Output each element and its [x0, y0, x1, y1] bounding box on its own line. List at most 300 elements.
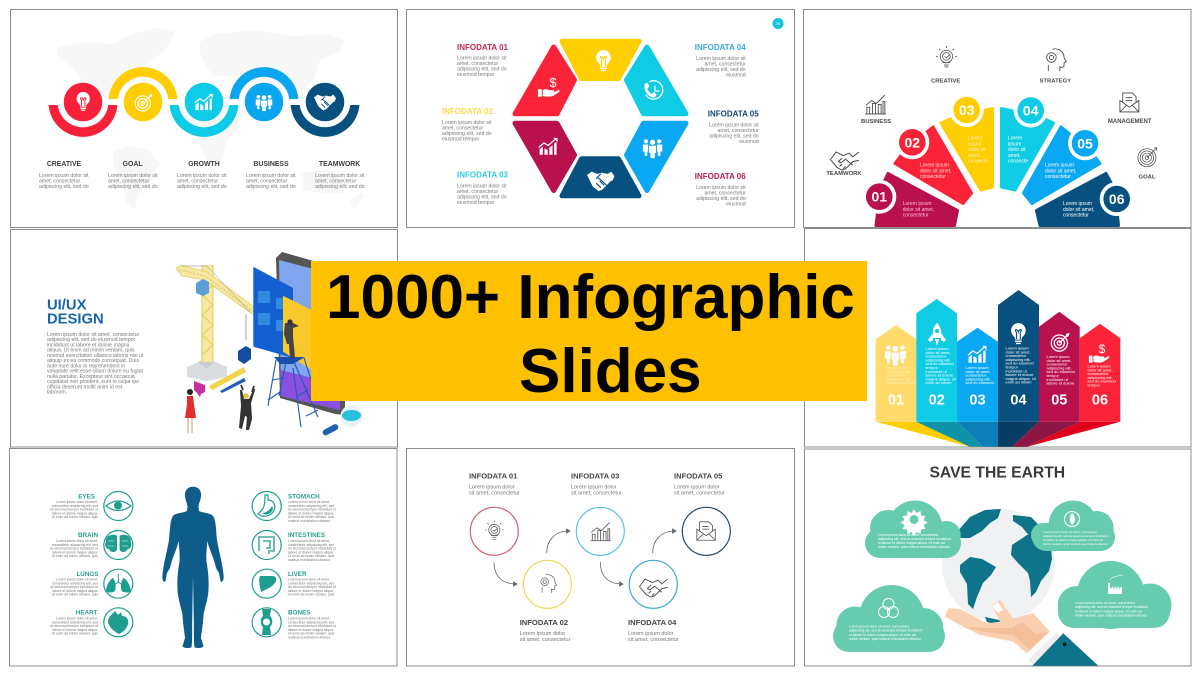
illustration: woman	[185, 389, 196, 433]
cloud: top right	[1031, 500, 1115, 551]
banner: 1000+ Infographic Slides: 1000+ Infographic	[326, 263, 855, 332]
column: creative: amet, consectetur	[39, 178, 81, 184]
arrow column 03: adipiscing elit,	[966, 376, 991, 381]
arrow column 06: adipiscing elit,	[1088, 375, 1113, 380]
segment texts: dolor sit amet,	[903, 207, 934, 213]
column: business: Lorem ipsum dolor sit	[246, 173, 296, 179]
organ: eyes: do eiusmod tempor incididunt ut	[50, 508, 98, 512]
arc: navy	[291, 105, 359, 137]
hexagon segments	[515, 41, 686, 196]
cloud: bottom left	[833, 585, 945, 652]
block: infodata 01: INFODATA 01	[457, 43, 509, 52]
arrow column 04: enim ad minim	[1006, 380, 1032, 385]
arrow column 06: consectetur	[1088, 371, 1109, 376]
segment texts: dolor sit	[1008, 147, 1026, 153]
column: business: amet, consectetur	[246, 178, 288, 184]
column: teamwork	[315, 161, 365, 190]
number badge 05: 05	[1077, 135, 1093, 151]
cloud: bottom left: ut labore et dolore magna aliqua. Ut enim ad	[849, 633, 916, 637]
organ: brain: consectetur adipiscing elit, sed	[52, 543, 98, 547]
organ: heart: consectetur adipiscing elit, sed	[52, 620, 98, 624]
step 2: sit amet, consectetur	[520, 637, 571, 643]
step 5: INFODATA 05	[674, 471, 723, 480]
column: goal: GOAL	[123, 161, 143, 168]
block: infodata 04: Lorem ipsum dolor sit	[696, 56, 746, 62]
cloud: bottom right: adipiscing elit, sed do eiusmod tempor incididunt	[1075, 605, 1148, 609]
column: creative	[39, 161, 89, 190]
organ: stomach: labore et dolore magna aliqua.	[288, 511, 334, 515]
segment texts: dolor sit amet,	[1063, 207, 1094, 213]
segment texts	[903, 136, 1094, 219]
block: infodata 01	[457, 43, 509, 78]
organ: eyes: Ut enim ad minim veniam, quis	[52, 515, 98, 519]
organ: lungs: LUNGS	[76, 571, 98, 578]
organ: brain: Ut enim ad minim veniam, quis	[52, 554, 98, 558]
arrow column 04: Lorem ipsum	[1006, 346, 1029, 350]
organ: intestines: do eiusmod tempor incididunt ut	[288, 547, 336, 551]
icon: bulb	[596, 50, 611, 71]
segment texts: dolor sit amet,	[1045, 168, 1076, 174]
label with icon: creative	[931, 46, 960, 85]
column: creative: CREATIVE	[47, 161, 82, 168]
organ: stomach: Lorem ipsum dolor sit amet,	[288, 500, 330, 504]
cloud: top right: minim veniam, quis nostrud exercitation ullamco	[1043, 542, 1108, 546]
body text: aliquip ex ea commodo consequat. Duis	[47, 358, 139, 364]
cloud: bottom left: adipiscing elit, sed do eiusmod tempor incididunt	[849, 629, 922, 633]
cloud: bottom left: minim veniam, quis nostrud exercitation ullamco	[849, 637, 921, 641]
number badge 06	[1100, 182, 1134, 216]
step 4: INFODATA 04	[628, 618, 677, 627]
arc: blue	[230, 67, 298, 99]
organ: intestines: consectetur adipiscing elit, sed	[288, 543, 334, 547]
organ: liver: consectetur adipiscing elit, sed	[288, 581, 334, 585]
segment texts: Lorem	[968, 136, 982, 142]
organ: stomach: Ut enim ad minim veniam, quis	[288, 515, 335, 519]
organ: bones: consectetur adipiscing elit, sed	[288, 620, 334, 624]
block: infodata 03: INFODATA 03	[457, 170, 509, 180]
segment texts: consectetur	[1063, 213, 1089, 219]
column: teamwork: Lorem ipsum dolor sit	[315, 173, 365, 179]
panel: infodata flow	[406, 448, 794, 666]
block: infodata 04: adipiscing elit, sed do	[696, 67, 746, 73]
body text: nostrud exercitation ullamco laboris nisi ut	[47, 353, 144, 359]
organ: brain: do eiusmod tempor incididunt ut	[50, 547, 98, 551]
arrow column 06: $	[1099, 342, 1106, 356]
organ: lungs	[50, 569, 133, 598]
column: business	[246, 161, 296, 190]
label with icon: teamwork: TEAMWORK	[826, 171, 862, 177]
column: goal: amet, consectetur	[108, 178, 150, 184]
arrow column 05: incididunt ut	[1046, 377, 1069, 382]
arrow column 05: adipiscing elit,	[1046, 365, 1072, 370]
cloud: bottom right: ut labore et dolore magna aliqua. Ut enim ad	[1075, 609, 1142, 613]
segment texts: consectetur	[920, 174, 946, 180]
organ: liver: do eiusmod tempor incididunt ut	[288, 585, 336, 589]
panel: semicircle fan	[804, 10, 1191, 228]
number badge 01: 01	[872, 189, 887, 205]
segment texts: Lorem	[1008, 136, 1022, 142]
icon: handshake	[587, 172, 615, 191]
label with icon: teamwork	[826, 152, 862, 177]
block: infodata 04	[695, 43, 746, 78]
organ: heart: labore et dolore magna aliqua.	[52, 628, 98, 632]
arrow column 05	[1039, 312, 1080, 422]
column: growth: Lorem ipsum dolor sit	[177, 173, 227, 179]
organ: liver: Lorem ipsum dolor sit amet,	[288, 578, 330, 582]
segment texts: dolor sit amet,	[920, 168, 951, 174]
arrow column 02: consectetur	[926, 354, 947, 359]
illustration: tools and chat bubble	[194, 367, 246, 397]
organ: bones: labore et dolore magna aliqua.	[288, 628, 334, 632]
segment texts: ipsum	[968, 141, 981, 147]
segment texts: ipsum	[1008, 141, 1021, 147]
organ: eyes: Lorem ipsum dolor sit amet,	[56, 500, 98, 504]
label with icon: strategy	[1039, 49, 1071, 85]
body text: incididunt ut labore et dolore magna	[47, 342, 130, 348]
arrow column 04: labore et dolore	[1006, 372, 1034, 377]
column: creative: Lorem ipsum dolor sit	[39, 173, 89, 179]
number badge 04	[1014, 94, 1048, 128]
organ: brain: labore et dolore magna aliqua.	[52, 550, 98, 554]
organ: stomach: STOMACH	[288, 493, 320, 500]
number badge 02	[895, 125, 929, 159]
organ: lungs: Lorem ipsum dolor sit amet,	[56, 578, 98, 582]
arc: yellow	[109, 67, 177, 99]
column: goal	[108, 161, 158, 190]
arrow column 02: adipiscing elit,	[926, 357, 951, 362]
hand holding globe	[945, 600, 1098, 666]
organ: bones: do eiusmod tempor incididunt ut	[288, 624, 336, 628]
column: business: adipiscing elit, sed do	[246, 184, 296, 190]
organ: stomach: consectetur adipiscing elit, sed	[288, 504, 334, 508]
banner: 1000+ Infographic Slides	[311, 261, 867, 406]
body text: aliqua. Ut enim ad minim veniam, quis	[47, 348, 135, 354]
arrow column 04: dolor sit amet,	[1006, 349, 1031, 354]
arrow column 06	[1080, 324, 1120, 422]
arrow column 05: labore et dolore	[1046, 381, 1075, 386]
arrows	[494, 529, 676, 586]
block: infodata 03: eiusmod tempor	[457, 200, 494, 206]
segment texts: amet,	[968, 153, 981, 159]
arrow column 03: sed do eiusmod	[966, 380, 994, 385]
organ: liver	[252, 569, 336, 598]
organ: brain	[50, 530, 133, 560]
arrow column 04: sed do eiusmod	[1006, 361, 1034, 366]
block: infodata 01: adipiscing elit, sed do	[457, 66, 507, 72]
world map background	[57, 28, 364, 210]
organ: lungs: Ut enim ad minim veniam, quis	[52, 593, 98, 597]
body text: nulla pariatur. Excepteur sint occaecat	[47, 374, 135, 380]
label with icon: goal	[1138, 148, 1157, 180]
number badge 05	[1068, 126, 1102, 160]
organ: stomach	[252, 492, 336, 523]
arrow column 06: 06	[1092, 392, 1108, 408]
column: goal: Lorem ipsum dolor sit	[108, 173, 158, 179]
arrow column 02: labore et dolore	[926, 373, 954, 378]
panel: creative goal growth timeline	[10, 10, 398, 228]
banner: 1000+ Infographic Slides: Slides	[519, 337, 702, 406]
block: infodata 02	[442, 107, 494, 142]
arrow column 04: tempor	[1006, 364, 1019, 370]
organ: heart: do eiusmod tempor incididunt ut	[50, 624, 98, 628]
organ: eyes: consectetur adipiscing elit, sed	[52, 504, 98, 508]
icon: dollar hand: $	[549, 75, 557, 90]
heading: DESIGN	[47, 312, 104, 328]
arrow column 05: dolor sit amet,	[1046, 358, 1072, 363]
step 5: Lorem ipsum dolor	[674, 485, 720, 491]
body text: cupidatat non proident, sunt in culpa qui	[47, 379, 139, 385]
cloud: top right: Lorem ipsum dolor sit amet, consectetur	[1043, 530, 1097, 534]
block: infodata 02: eiusmod tempor	[442, 136, 479, 142]
circle: cyan chart	[185, 83, 223, 121]
arrow column 04: adipiscing elit,	[1006, 357, 1031, 362]
illustration: phone and panels	[253, 252, 345, 427]
step 4: sit amet, consectetur	[628, 637, 679, 643]
organ: heart: HEART	[76, 610, 98, 617]
block: infodata 01: amet, consectetur	[457, 61, 499, 67]
cloud: top left: Lorem ipsum dolor sit amet, consectetur	[878, 533, 939, 537]
label with icon: creative: CREATIVE	[931, 79, 960, 85]
cloud: bottom right: Lorem ipsum dolor sit amet, consectetur	[1075, 601, 1136, 605]
label with icon: strategy: STRATEGY	[1039, 79, 1071, 85]
panel: UI UX design	[10, 230, 398, 447]
number badge 06: 06	[1109, 191, 1125, 207]
organ: intestines: labore et dolore magna aliqua.	[288, 550, 334, 554]
cloud: top left: adipiscing elit, sed do eiusmod tempor incididunt	[878, 537, 951, 541]
page number badge	[772, 18, 784, 29]
block: infodata 02: adipiscing elit, sed do	[442, 131, 492, 137]
circle: yellow target	[124, 83, 162, 121]
arrow column 04: incididunt ut	[1006, 368, 1028, 373]
arrow column 02: enim ad minim	[926, 380, 952, 385]
block: infodata 02: INFODATA 02	[442, 107, 494, 116]
segment texts: Lorem ipsum	[1045, 162, 1074, 168]
block: infodata 06: adipiscing elit, sed do	[696, 196, 746, 202]
heading: UI/UX	[47, 298, 87, 314]
arrow column 02: dolor sit amet,	[926, 350, 951, 355]
organ: intestines: Ut enim ad minim veniam, quis	[288, 554, 335, 558]
cloud: bottom left: Lorem ipsum dolor sit amet, consectetur	[849, 624, 910, 628]
block: infodata 05: adipiscing elit, sed do	[709, 134, 759, 140]
block: infodata 02: Lorem ipsum dolor sit	[442, 120, 492, 126]
arrow column 02: sed do eiusmod	[926, 361, 954, 366]
block: infodata 03: Lorem ipsum dolor sit	[457, 184, 507, 190]
segment texts: consecte	[968, 158, 988, 164]
fan segments	[876, 108, 1118, 226]
arrow column 05: sed do eiusmod	[1046, 369, 1075, 374]
arrow column 04	[998, 290, 1039, 422]
block: infodata 03: amet, consectetur	[457, 189, 499, 195]
icon: phone clock	[644, 81, 663, 99]
arc: red	[49, 105, 117, 137]
arrow column 05: Lorem ipsum	[1046, 354, 1070, 359]
arrow column 06: sed do eiusmod	[1088, 379, 1116, 384]
column: business: BUSINESS	[253, 161, 289, 168]
panel: hexagon infodata	[406, 10, 794, 228]
segment texts: amet,	[1008, 153, 1021, 159]
segment texts: consecte	[1008, 158, 1028, 164]
label with icon: business	[861, 95, 891, 125]
body text: aute irure dolor in reprehenderit in	[47, 364, 125, 370]
step 1: Lorem ipsum dolor	[469, 485, 515, 491]
organ: stomach: do eiusmod tempor incididunt ut	[288, 508, 336, 512]
arrow column 01: consectetur	[886, 373, 907, 378]
step 3: sit amet, consectetur	[571, 491, 622, 497]
block: infodata 06: INFODATA 06	[695, 172, 746, 181]
number badge 03	[950, 93, 984, 127]
body silhouette	[162, 487, 224, 648]
arrow column 06: tempor	[1088, 382, 1101, 388]
circle: red bulb	[64, 83, 102, 121]
arrow column 02: magna aliqua. Ut	[926, 376, 957, 381]
arrow column 03: 03	[969, 392, 986, 408]
organ: bones: Ut enim ad minim veniam, quis	[288, 632, 335, 636]
arrow column 06: Lorem ipsum	[1088, 364, 1111, 368]
column: teamwork: adipiscing elit, sed do	[315, 184, 365, 190]
block: infodata 05: eiusmod	[739, 139, 759, 145]
segment texts: consectetur	[1045, 174, 1071, 180]
arrow column 01	[876, 325, 916, 422]
organ: liver: LIVER	[288, 571, 307, 578]
cloud: top left: minim veniam, quis nostrud exercitation ullamco	[878, 545, 950, 549]
label with icon: goal: GOAL	[1138, 174, 1156, 180]
organ: bones	[252, 608, 336, 640]
organ: bones: BONES	[288, 610, 310, 617]
arrow column 04: 04	[1010, 392, 1027, 408]
organ: bones: Lorem ipsum dolor sit amet,	[288, 616, 330, 620]
block: infodata 02: amet, consectetur	[442, 126, 484, 132]
icon: chart	[539, 138, 558, 155]
arrow column 05: consectetur	[1046, 362, 1068, 367]
step 3: Lorem ipsum dolor	[571, 485, 617, 491]
step 4: Lorem ipsum dolor	[628, 631, 674, 637]
column: goal: adipiscing elit, sed do	[108, 184, 158, 190]
label with icon: business: BUSINESS	[861, 119, 891, 125]
number badge 03: 03	[959, 102, 975, 118]
body text: Lorem ipsum dolor sit amet, consectetur	[47, 332, 140, 338]
arrow column 01: adipiscing elit,	[886, 376, 911, 381]
arrow column 03: dolor sit amet,	[966, 369, 991, 374]
illustration: man	[239, 385, 255, 430]
organ: intestines: nostrud exercitation ullamco	[288, 558, 330, 562]
body text: adipiscing elit, sed do eiusmod tempor	[47, 337, 136, 343]
block: infodata 06	[695, 172, 746, 208]
arrow column 01: Lorem ipsum	[886, 365, 910, 370]
step 1: INFODATA 01	[469, 471, 518, 480]
organ: lungs: do eiusmod tempor incididunt ut	[50, 585, 98, 589]
column: teamwork: TEAMWORK	[319, 161, 360, 168]
body text: officia deserunt mollit anim id est	[47, 384, 123, 390]
organ: eyes: EYES	[78, 493, 95, 500]
arrow column 03: Lorem ipsum	[966, 365, 989, 370]
block: infodata 06: Lorem ipsum dolor sit	[696, 185, 746, 191]
organ: eyes: labore et dolore magna aliqua.	[52, 511, 98, 515]
column shadows	[876, 422, 1120, 447]
body text: laborum.	[47, 390, 67, 396]
block: infodata 06: eiusmod	[726, 202, 746, 208]
organ: bones: nostrud exercitation ullamco	[288, 636, 330, 640]
page number badge: 36	[776, 21, 781, 26]
arrow column 02: incididunt ut	[926, 369, 948, 374]
organ: intestines: INTESTINES	[288, 532, 325, 539]
arrow column 03: consectetur	[966, 373, 987, 378]
arc: cyan	[170, 105, 238, 137]
block: infodata 03	[457, 170, 509, 206]
arrow column 02: tempor	[926, 365, 939, 370]
arrow column 01: 01	[888, 392, 904, 408]
block: infodata 04: eiusmod	[726, 72, 746, 78]
organ: heart: Lorem ipsum dolor sit amet,	[56, 616, 98, 620]
circle: navy handshake	[306, 83, 344, 121]
block: infodata 05	[708, 110, 759, 145]
arrow column 01: sed do eiusmod	[886, 380, 914, 385]
organ: intestines: Lorem ipsum dolor sit amet,	[288, 539, 330, 543]
step 5: sit amet, consectetur	[674, 491, 725, 497]
illustration: magnifier	[322, 405, 362, 436]
illustration: crane	[176, 265, 258, 381]
segment texts: Lorem ipsum	[1063, 201, 1092, 207]
block: infodata 05: amet, consectetur	[717, 128, 759, 134]
block: infodata 05: INFODATA 05	[708, 110, 759, 118]
block: infodata 04: INFODATA 04	[695, 43, 746, 52]
arrow column 03	[957, 328, 998, 422]
cloud: bottom right	[1058, 561, 1172, 629]
column: creative: adipiscing elit, sed do	[39, 184, 89, 190]
step 2: INFODATA 02	[520, 618, 568, 627]
arrow column 05: 05	[1051, 392, 1067, 408]
segment texts: Lorem ipsum	[903, 201, 932, 207]
label with icon: management: MANAGEMENT	[1108, 119, 1152, 125]
number badge 02: 02	[905, 134, 920, 150]
panel: human body organs	[10, 448, 397, 666]
block: infodata 04: amet, consectetur	[704, 62, 746, 68]
arrow column 02: 02	[929, 392, 945, 408]
step 2	[520, 560, 571, 643]
circle: blue people	[245, 83, 283, 121]
block: infodata 05: Lorem ipsum dolor sit	[709, 122, 759, 128]
organ: lungs: consectetur adipiscing elit, sed	[52, 581, 98, 585]
cloud: top left: ut labore et dolore magna aliqua. Ut enim ad	[878, 541, 945, 545]
arrow column 02: Lorem ipsum	[926, 346, 949, 351]
body text: voluptate velit esse cillum dolore eu fugiat	[47, 369, 144, 375]
segment texts: Lorem ipsum	[920, 162, 949, 168]
arrow column 04: magna aliqua. Ut	[1006, 376, 1037, 381]
number badge 01	[862, 180, 896, 214]
organ: brain: Lorem ipsum dolor sit amet,	[56, 539, 98, 543]
organ: liver: labore et dolore magna aliqua.	[288, 589, 334, 593]
panel: arrow columns	[804, 228, 1191, 447]
arrow column 05: tempor	[1046, 373, 1060, 378]
cloud: top right: adipiscing elit, sed do eiusmod tempor incididunt	[1043, 534, 1109, 538]
segment texts: consectetur	[903, 213, 929, 219]
block: infodata 03: adipiscing elit, sed do	[457, 194, 507, 200]
organ: lungs: labore et dolore magna aliqua.	[52, 589, 98, 593]
number badge 04: 04	[1023, 102, 1039, 118]
icon: dollar hand	[538, 75, 559, 97]
organ: eyes	[50, 492, 133, 520]
icon: people	[643, 139, 662, 158]
organ: liver: Ut enim ad minim veniam, quis	[288, 593, 335, 597]
step 3	[571, 471, 624, 555]
arrow column 04: consectetur	[1006, 353, 1027, 358]
step 2: Lorem ipsum dolor	[520, 631, 565, 637]
organ: stomach: nostrud exercitation ullamco	[288, 519, 330, 523]
panel: save the earth	[804, 449, 1191, 666]
organ: heart	[50, 608, 133, 637]
column: growth	[177, 161, 227, 190]
step 1	[469, 471, 520, 555]
column: growth: adipiscing elit, sed do	[177, 184, 227, 190]
